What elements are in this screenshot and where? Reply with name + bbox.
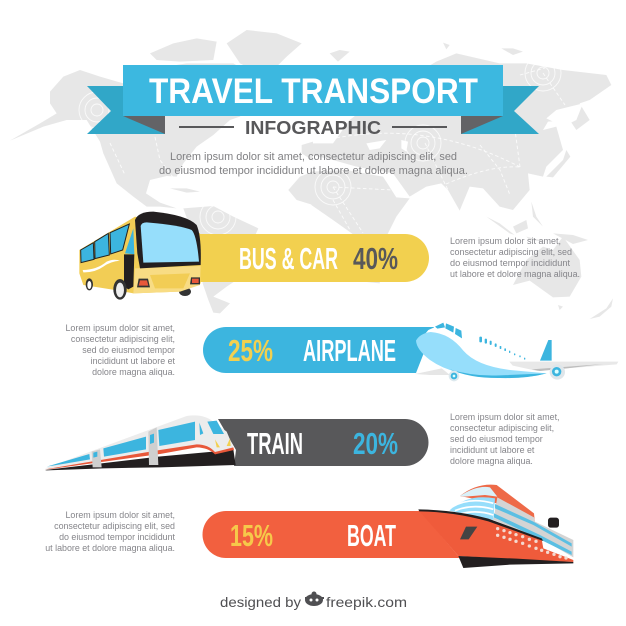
dark bar — [218, 419, 428, 466]
description: dolore magna aliqua. — [92, 367, 175, 377]
description: do eiusmod tempor incididunt — [450, 258, 571, 268]
description: Lorem ipsum dolor sit amet, — [450, 412, 560, 422]
description: consectetur adipiscing elit, — [450, 423, 554, 433]
description — [450, 236, 580, 279]
footer credit: designed by — [220, 594, 301, 610]
icon: train — [45, 415, 236, 470]
airplane row — [66, 323, 618, 381]
icon: bus — [79, 212, 201, 300]
value: 25%: 25% — [228, 333, 273, 368]
description — [45, 510, 176, 553]
train row — [45, 412, 559, 470]
orange bar — [202, 511, 460, 558]
icon: airplane — [415, 323, 618, 381]
description: consectetur adipiscing elit, sed — [54, 521, 175, 531]
description: ut labore et dolore magna aliqua. — [450, 269, 580, 279]
intro text: Lorem ipsum dolor sit amet, consectetur adipiscing elit, sed — [170, 151, 457, 163]
description: incididunt ut labore et — [91, 356, 176, 366]
description: incididunt ut labore et — [450, 445, 535, 455]
world map background — [10, 30, 613, 319]
description: Lorem ipsum dolor sit amet, — [66, 510, 175, 520]
icon: freepik logo — [305, 592, 324, 606]
description: do eiusmod tempor incididunt — [59, 532, 176, 542]
intro text: do eiusmod tempor incididunt ut labore et dolore magna aliqua. — [159, 165, 468, 177]
icon: boat — [418, 485, 573, 568]
blue bar — [203, 327, 434, 373]
description: ut labore et dolore magna aliqua. — [45, 543, 175, 553]
description: consectetur adipiscing elit, — [71, 334, 175, 344]
footer credit: freepik.com — [326, 594, 407, 610]
value: 15%: 15% — [230, 518, 273, 553]
label: airplane: AIRPLANE — [303, 333, 396, 368]
description — [450, 412, 560, 466]
description: sed do eiusmod tempor — [450, 434, 543, 444]
title: TRAVEL TRANSPORT — [149, 72, 478, 111]
description: sed do eiusmod tempor — [82, 345, 175, 355]
description — [66, 323, 176, 377]
value: 20%: 20% — [353, 426, 398, 461]
yellow bar — [196, 234, 429, 282]
title ribbon — [87, 65, 539, 134]
intro text — [159, 151, 468, 177]
description: Lorem ipsum dolor sit amet, — [66, 323, 175, 333]
bus & car row — [79, 212, 580, 300]
description: Lorem ipsum dolor sit amet, — [450, 236, 561, 246]
label: train: TRAIN — [247, 426, 303, 461]
boat row — [45, 485, 573, 568]
label: boat: BOAT — [347, 518, 396, 553]
footer credit — [220, 592, 407, 610]
subtitle: INFOGRAPHIC — [245, 117, 381, 138]
description: consectetur adipiscing elit, sed — [450, 247, 572, 257]
value: 40%: 40% — [353, 241, 398, 276]
label: bus & car: BUS & CAR — [239, 241, 338, 276]
description: dolore magna aliqua. — [450, 456, 533, 466]
